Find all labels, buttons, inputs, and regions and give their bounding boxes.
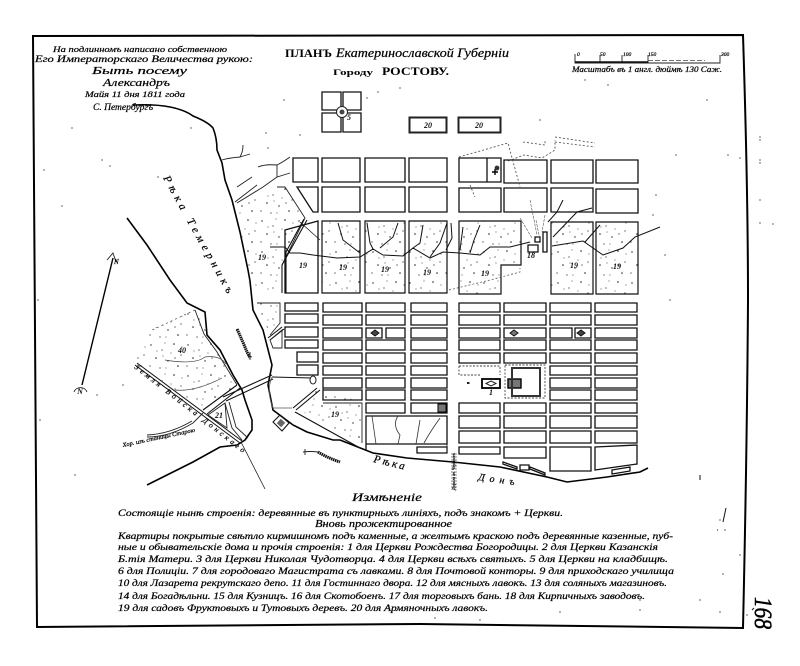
legend: Вновь прожектированное: [315, 519, 453, 530]
road edges beside the label: [452, 453, 456, 490]
scale bar: 0: [577, 52, 580, 58]
church 4: [492, 166, 499, 175]
imperial approval inscription: На подлинномъ написано собственною: [52, 44, 227, 54]
riverside buildings: [503, 462, 630, 475]
river name: Don: Донъ: [477, 472, 520, 489]
vertical road label: Дорога въ Черкаскъ: [451, 452, 456, 491]
imperial approval inscription: Александръ: [102, 77, 170, 89]
square plan with church 5: [322, 92, 361, 132]
legend: 6 для Полиціи. 7 для городоваго Магистрата съ лавками. 8 для Почтовой конторы. 9 для приходскаго училища: [118, 566, 675, 576]
stream through orchards: [270, 200, 660, 258]
armenian shops 20: 20: [474, 121, 483, 130]
scale bar: 100: [623, 52, 632, 58]
scale bar: 300: [720, 52, 730, 58]
residential blocks centre east: [459, 303, 546, 458]
title: Екатеринославской Губерніи: [335, 46, 509, 60]
orchards 19: 19: [570, 261, 578, 270]
river name: Temernik: Рѣка Темерникъ: [160, 173, 237, 299]
road to stanitsa: Хор. изъ станицы Старою: [121, 428, 197, 449]
scale bar: 50: [600, 52, 606, 58]
stippled southwest orchard: 19: [331, 410, 339, 419]
riverside buildings near orchard: 18: [527, 251, 535, 260]
orchards 19: [238, 187, 638, 294]
orchards 19: 19: [299, 261, 307, 270]
legend: Измѣненіе: [351, 490, 423, 504]
stippled southwest orchard: [295, 388, 362, 448]
southern block with stream: [366, 416, 447, 453]
riverside buildings near orchard: [449, 200, 547, 290]
western bank gardens: [135, 310, 237, 410]
specks and margin marks: [38, 80, 773, 625]
imperial approval inscription: С. Петербургъ: [93, 102, 153, 113]
scale bar: Масштабъ въ 1 англ. дюймѣ 130 Саж.: [571, 65, 722, 74]
north arrow: N: [113, 258, 119, 266]
legend: Квартиры покрытые свѣтло кирмишномъ подъ каменные, а желтымъ краскою подъ деревянные казенные, пуб-: [117, 531, 673, 541]
title: Городу: [333, 67, 374, 77]
legend: 10 для Лазарета рекрутскаго депо. 11 для Гостиннаго двора. 12 для мясныхъ лавокъ. 13 для соляныхъ магазиновъ.: [118, 578, 667, 588]
main square with churches and offices: [459, 365, 545, 398]
legend: 19 для садовъ Фруктовыхъ и Тутовыхъ деревъ. 20 для Армяночныхъ лавокъ.: [118, 603, 488, 613]
river name: Don: Рѣка: [371, 453, 409, 473]
western roads and bridge: [135, 363, 273, 489]
legend: Б.тія Матери. 3 для Церкви Николая Чудотворца. 4 для Церкви всѣхъ святыхъ. 5 для Церкви на кладбищѣ.: [117, 554, 668, 564]
imperial approval inscription: [34, 44, 253, 113]
north arrow: N: [76, 387, 84, 396]
square plan with church 5: 5: [347, 113, 351, 122]
orchards 19: 19: [258, 253, 266, 262]
river Don shoreline: [340, 440, 648, 482]
orchards 19: 19: [613, 262, 621, 271]
boundary label: Земля Войска Донскаго: [133, 362, 250, 456]
north arrow: [74, 253, 119, 396]
western bank gardens: 40: [177, 346, 186, 355]
legend: ные и обывательскіе дома и прочія строенія: 1 для Церкви Рождества Богородицы. 2 для Церкви Казанскія: [118, 542, 658, 552]
orchards 19: 19: [339, 263, 347, 272]
residential blocks east: [550, 303, 637, 471]
orchards 19: 19: [481, 269, 489, 278]
imperial approval inscription: Его Императорскаго Величества рукою:: [34, 54, 253, 64]
legend: Состоящіе нынѣ строенія: деревянные въ пунктирныхъ линіяхъ, подъ знакомъ + Церкви.: [118, 508, 563, 518]
orchards 19: 19: [423, 268, 431, 277]
armenian shops 20: 20: [423, 121, 432, 130]
river name: Don: [371, 453, 520, 489]
imperial approval inscription: Майя 11 дня 1811 года: [84, 89, 185, 99]
churches in blocks: [371, 330, 585, 412]
legend: [117, 490, 675, 613]
title: [285, 46, 509, 78]
title: ПЛАНЪ: [285, 48, 332, 60]
residential blocks centre west: [366, 303, 447, 413]
orchards 19: 19: [381, 265, 389, 274]
legend: 14 для Богадѣльни. 15 для Кузницъ. 16 для Скотобоенъ. 17 для торговыхъ бань. 18 для Кирпичныхъ заводовъ.: [118, 591, 645, 601]
road to stanitsa: [121, 413, 203, 449]
title: РОСТОВУ.: [382, 66, 449, 78]
scale bar: 150: [648, 52, 656, 58]
southwest stippled corner: [257, 303, 284, 348]
armenian shops 20: [410, 118, 500, 132]
fortress road and building: [269, 376, 320, 431]
residential blocks west: [285, 303, 362, 400]
archival sheet number: 168: [749, 597, 776, 629]
sheet frame: [33, 35, 748, 628]
imperial approval inscription: Быть посему: [90, 65, 187, 77]
northern city blocks: [293, 158, 638, 213]
river Temernik banks: [127, 105, 340, 485]
current marks: [237, 329, 340, 462]
planned outskirts dotted lines: [459, 137, 595, 197]
western roads and bridge: 21: [214, 411, 223, 420]
tributary ravines at upper river: [222, 145, 290, 203]
main square with churches and offices: 1: [489, 388, 493, 397]
scale bar: [571, 52, 730, 74]
